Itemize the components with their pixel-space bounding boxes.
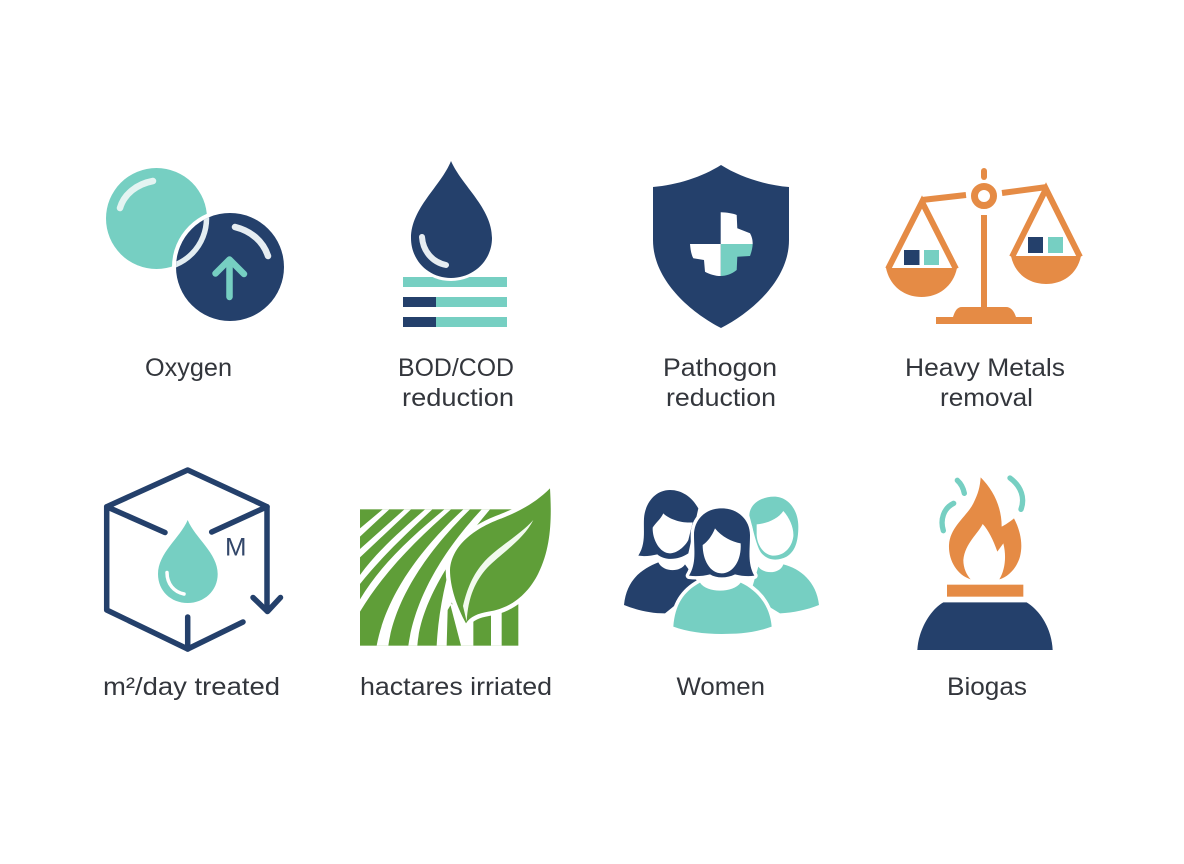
icon grid infographic xyxy=(104,161,1083,700)
panel: hectares irrigated xyxy=(360,488,552,701)
panel: BOD/COD reduction xyxy=(398,161,514,412)
label: heavy metals removal: removal xyxy=(940,384,1033,412)
panel: volume treated xyxy=(103,470,280,701)
back left woman xyxy=(624,490,700,613)
icon: three women xyxy=(624,490,819,634)
icon: shield with cross xyxy=(653,165,789,328)
label: pathogen reduction: reduction xyxy=(666,384,776,412)
label: BOD/COD reduction: reduction xyxy=(402,384,514,412)
label: BOD/COD reduction xyxy=(398,354,514,412)
icon: biogas flame burner xyxy=(917,477,1053,650)
label: pathogen reduction xyxy=(663,354,777,412)
label: pathogen reduction: Pathogon xyxy=(663,354,777,382)
label: oxygen: Oxygen xyxy=(145,354,232,382)
label: heavy metals removal: Heavy Metals xyxy=(905,354,1065,382)
label: hectares irrigated: hactares irriated xyxy=(360,673,552,701)
label: biogas: Biogas xyxy=(947,673,1027,701)
label: heavy metals removal xyxy=(905,354,1065,412)
back right woman xyxy=(749,497,819,613)
label: volume treated: m²/day treated xyxy=(103,673,280,701)
panel: pathogen reduction xyxy=(653,165,789,412)
label: BOD/COD reduction: BOD/COD xyxy=(398,354,514,382)
icon: drop over layers xyxy=(403,161,507,327)
icon: balance scale xyxy=(886,171,1081,324)
panel: women xyxy=(624,490,819,701)
icon: cube with water drop: M xyxy=(225,534,246,562)
icon: oxygen bubbles xyxy=(106,168,288,325)
icon: field and leaf xyxy=(360,488,551,646)
panel: oxygen xyxy=(106,168,288,382)
panel: heavy metals removal xyxy=(886,171,1081,412)
front woman xyxy=(673,508,772,634)
icon: cube with water drop xyxy=(107,470,280,649)
label: women: Women xyxy=(676,673,765,701)
panel: biogas xyxy=(917,477,1053,701)
